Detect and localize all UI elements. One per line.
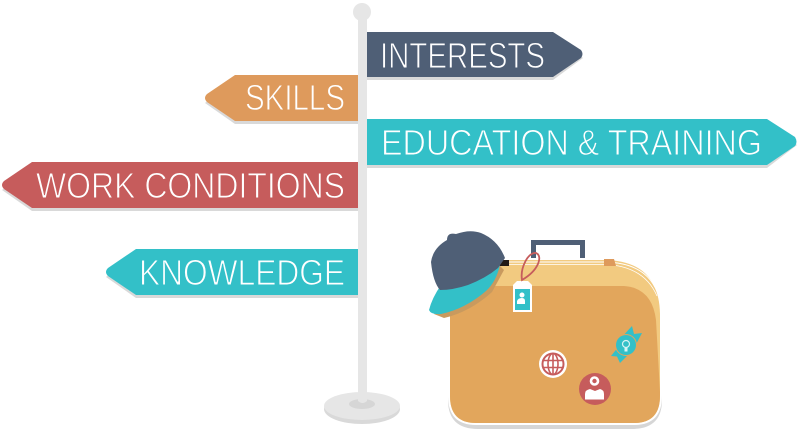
arrow: skills — [205, 75, 358, 124]
sticker: lightbulb — [611, 326, 642, 363]
suitcase lid — [448, 258, 662, 425]
suitcase front panel — [450, 286, 660, 423]
suitcase strap tab — [604, 259, 616, 266]
baseball cap — [429, 231, 509, 318]
suitcase handle — [534, 242, 582, 261]
cap shadow — [434, 264, 504, 318]
sticker: person with gear — [579, 373, 611, 405]
arrow: interests: INTERESTS — [380, 35, 545, 76]
sticker: globe — [539, 350, 567, 378]
suitcase shadow — [448, 330, 662, 429]
arrow: work conditions: WORK CONDITIONS — [36, 165, 345, 206]
arrow: knowledge — [106, 249, 358, 298]
cap visor — [429, 265, 500, 314]
cap dome — [431, 231, 505, 290]
signpost pole — [324, 3, 400, 424]
arrow: education and training: EDUCATION & TRAINING — [381, 122, 762, 163]
cap button strap — [498, 260, 509, 266]
arrow: knowledge: KNOWLEDGE — [139, 252, 345, 293]
suitcase — [448, 242, 662, 429]
luggage tag — [513, 253, 539, 312]
arrow: skills: SKILLS — [245, 77, 345, 118]
